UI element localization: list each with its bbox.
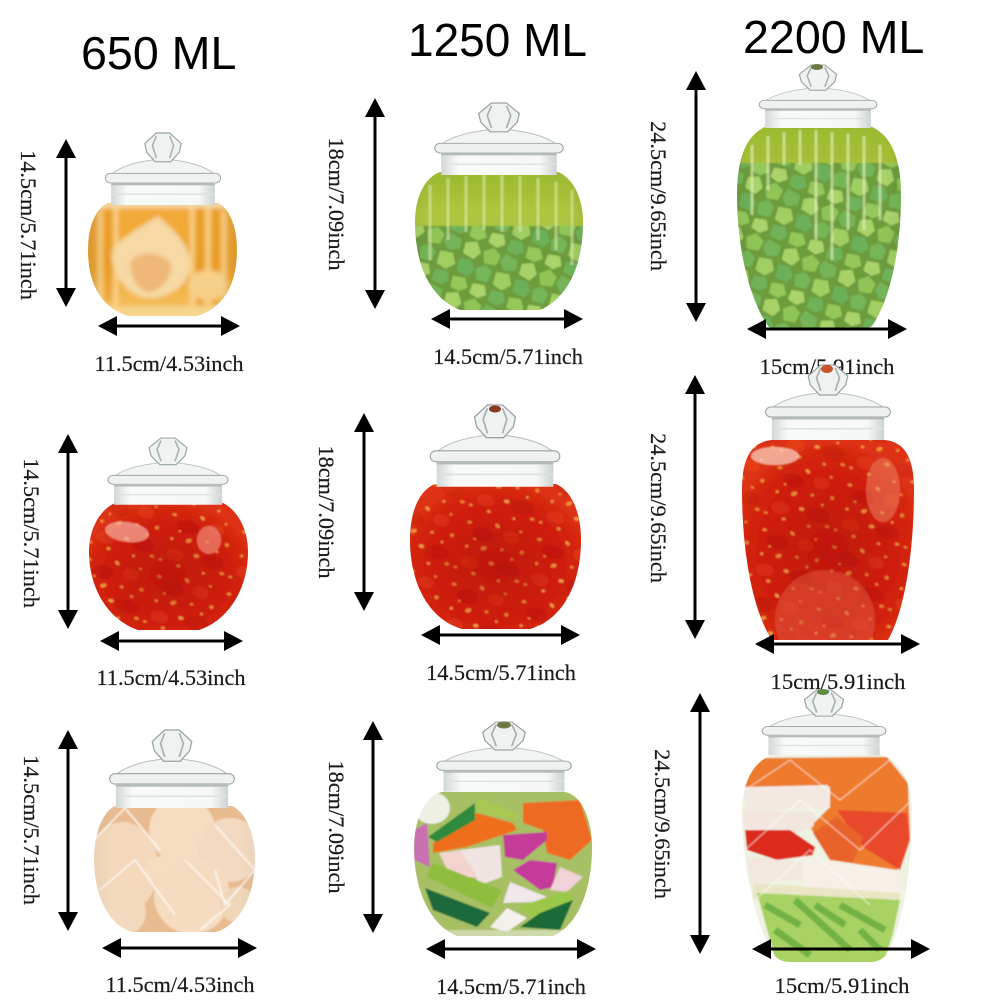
glass highlight: right: [197, 526, 221, 554]
label: height 14.5 cm: 14.5cm/5.71inch: [16, 150, 41, 300]
arrow: height jar 9: [690, 693, 710, 954]
jar lid: [108, 438, 228, 505]
arrow: width jar 2: [100, 631, 243, 651]
jar contents: green vegetables in oil: [415, 172, 583, 310]
jar contents: garlic in amber brine: [85, 200, 240, 320]
heading: 650 ML: 650 ML: [81, 27, 236, 79]
jar contents: carrot, onion, cucumber: [410, 790, 596, 940]
jar contents: carrot, radish, tomato, celery: [738, 753, 916, 965]
label: width 11.5 cm: 11.5cm/4.53inch: [96, 665, 246, 690]
arrow: height jar 1: [56, 139, 76, 307]
arrow: width jar 7: [747, 319, 907, 339]
label: height 14.5 cm: 14.5cm/5.71inch: [19, 755, 44, 905]
jar: 1250 ml red chili: [405, 405, 585, 635]
jar: 650 ml pale garlic cloves: [86, 730, 262, 936]
jar: 2200 ml red chili: [742, 364, 914, 640]
jar lid: [766, 365, 890, 440]
knob tip: [489, 406, 501, 412]
jar contents: chili paste: [85, 500, 250, 635]
label: height 18 cm: 18cm/7.09inch: [324, 137, 349, 271]
label: width 15 cm: 15cm/5.91inch: [771, 669, 905, 694]
jar: 2200 ml green pebbles: [733, 64, 905, 334]
label: width 14.5 cm: 14.5cm/5.71inch: [433, 344, 583, 369]
label: width 11.5 cm: 11.5cm/4.53inch: [105, 972, 255, 997]
glass highlight: right: [866, 458, 900, 522]
knob tip: [821, 365, 833, 373]
jar contents: green vegetables in oil: [733, 124, 905, 334]
jar: 650 ml red chili: [85, 438, 250, 635]
label: width 11.5 cm: 11.5cm/4.53inch: [94, 351, 244, 376]
knob tip: [497, 722, 511, 728]
jar lid: [437, 722, 571, 792]
arrow: height jar 6: [363, 721, 383, 933]
dimension labels: first row widths: [16, 121, 894, 379]
jar contents: chili paste: [742, 440, 914, 640]
label: width 14.5 cm: 14.5cm/5.71inch: [436, 974, 586, 999]
heading: 1250 ML: 1250 ML: [408, 14, 587, 66]
jar lid: [435, 103, 563, 175]
arrow: width jar 3: [102, 938, 257, 958]
arrow: height jar 2: [58, 434, 78, 629]
knob tip: [817, 689, 829, 695]
label: width 15 cm: 15cm/5.91inch: [775, 973, 909, 998]
label: height 24.5 cm: 24.5cm/9.65inch: [646, 121, 671, 271]
label: height 14.5 cm: 14.5cm/5.71inch: [19, 458, 44, 608]
glass highlight: left: [104, 519, 150, 545]
heading: 2200 ML: 2200 ML: [743, 11, 924, 63]
arrow: width jar 1: [98, 316, 240, 336]
label: height 18 cm: 18cm/7.09inch: [324, 760, 349, 894]
glass highlight: left: [751, 447, 799, 465]
arrow: height jar 7: [686, 71, 706, 322]
jar: 1250 ml mixed vegetables: [410, 722, 596, 940]
arrow: width jar 6: [426, 939, 596, 959]
jar contents: cream cloves with net texture: [94, 806, 255, 932]
jar lid: [110, 730, 234, 808]
jar: 1250 ml green pebbles: [410, 103, 588, 316]
arrow: height jar 3: [58, 730, 78, 931]
jar: 650 ml amber garlic: [85, 133, 240, 320]
jar lid: [762, 690, 886, 755]
jar contents: chili paste: [410, 484, 581, 629]
dimension labels: second and third rows: [19, 433, 909, 999]
label: width 14.5 cm: 14.5cm/5.71inch: [426, 660, 576, 685]
jar: 2200 ml mixed vegetables: [738, 689, 916, 965]
label: height 24.5 cm: 24.5cm/9.65inch: [646, 433, 671, 583]
arrow: width jar 9: [752, 939, 930, 959]
arrow: height jar 4: [365, 98, 385, 309]
arrow: height jar 5: [354, 413, 374, 611]
arrow: height jar 8: [685, 375, 705, 639]
label: height 24.5 cm: 24.5cm/9.65inch: [650, 749, 675, 899]
label: height 18 cm: 18cm/7.09inch: [314, 445, 339, 579]
knob tip: [811, 64, 823, 70]
jar lid: [759, 65, 877, 128]
arrow: width jar 4: [431, 309, 583, 329]
label: width 15 cm: 15cm/5.91inch: [760, 354, 894, 379]
jar lid: [430, 405, 560, 487]
arrow: width jar 8: [755, 634, 920, 654]
arrow: width jar 5: [421, 625, 580, 645]
jar lid: [105, 133, 221, 205]
